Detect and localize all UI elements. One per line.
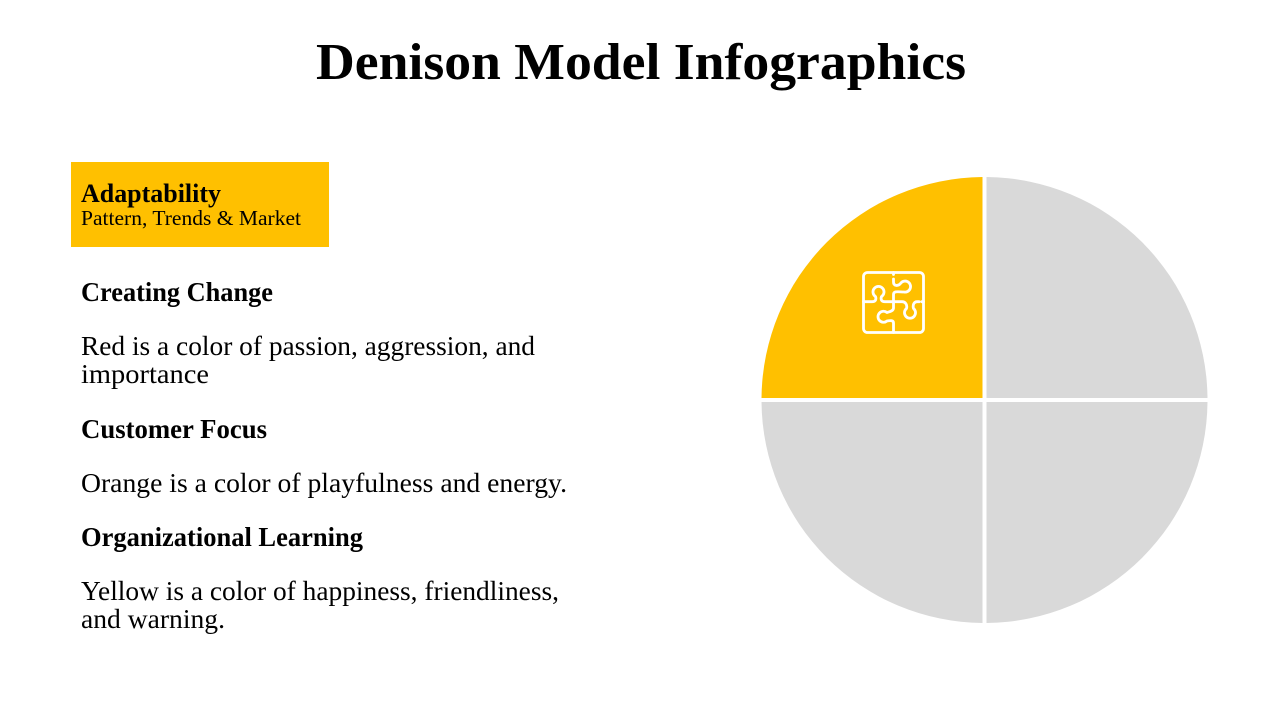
text block: organizational learning: and warning.	[81, 604, 225, 634]
title: Denison Model Infographics	[316, 34, 966, 91]
icon: puzzle	[864, 272, 924, 332]
text block: organizational learning	[81, 522, 559, 634]
panel: adaptability label	[71, 162, 329, 247]
panel: adaptability label: Adaptability	[81, 179, 221, 208]
segment: bottom right	[986, 402, 1208, 623]
text block: creating change: importance	[81, 359, 209, 389]
panel: adaptability label: Pattern, Trends & Market	[81, 206, 301, 230]
text block: customer focus: Orange is a color of playfulness and energy.	[81, 468, 567, 498]
text block: customer focus: Customer Focus	[81, 414, 267, 444]
text block: organizational learning: Yellow is a color of happiness, friendliness,	[81, 576, 559, 606]
chart: four-part pie	[762, 177, 1208, 623]
text block: creating change: Red is a color of passion, aggression, and	[81, 331, 535, 361]
segment: top left, adaptability	[762, 177, 982, 398]
text block: creating change	[81, 277, 535, 389]
segment: top right	[986, 177, 1208, 398]
segment: bottom left	[762, 402, 982, 623]
text block: creating change: Creating Change	[81, 277, 273, 307]
text block: customer focus	[81, 414, 567, 498]
text block: organizational learning: Organizational Learning	[81, 522, 363, 552]
